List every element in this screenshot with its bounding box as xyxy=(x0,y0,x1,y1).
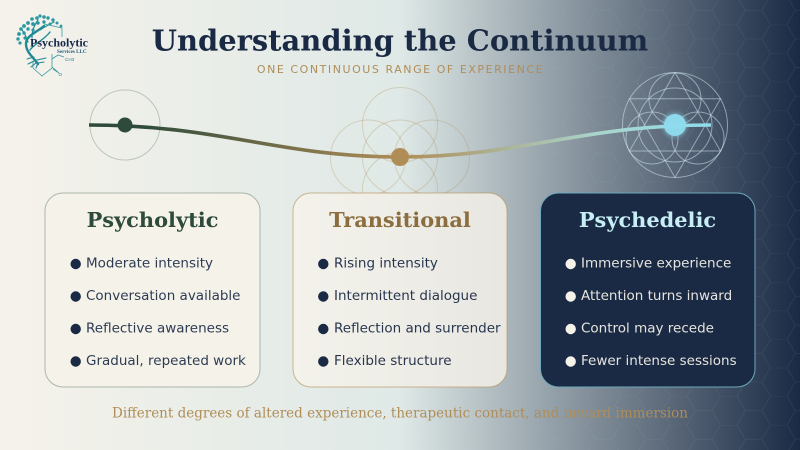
right geometry: sacred geometry figure xyxy=(622,72,728,178)
logo molecule lines xyxy=(33,24,64,76)
list: psycholytic: Gradual, repeated work xyxy=(86,353,246,369)
logo CH3 label: CH3 xyxy=(65,57,75,62)
heading: transitional: Transitional xyxy=(329,207,471,232)
panel: psychedelic xyxy=(540,193,755,387)
list: transitional xyxy=(318,255,501,369)
centre geometry: five overlapping circles xyxy=(330,88,470,228)
subtitle: ONE CONTINUOUS RANGE OF EXPERIENCE xyxy=(257,63,544,76)
hexagon pattern xyxy=(669,0,800,450)
panel: transitional xyxy=(293,193,507,387)
continuum curve xyxy=(89,125,711,157)
list: psychedelic: Immersive experience xyxy=(581,255,731,271)
logo O label: O xyxy=(58,72,62,77)
list: transitional: Flexible structure xyxy=(334,353,452,369)
list: psychedelic xyxy=(566,255,737,369)
list: transitional: Intermittent dialogue xyxy=(334,288,477,304)
node: psychedelic xyxy=(663,113,687,137)
list: psychedelic: Control may recede xyxy=(581,320,714,336)
title: Understanding the Continuum xyxy=(152,24,648,58)
panel: psycholytic xyxy=(45,193,260,387)
left geometry: single circle xyxy=(90,90,160,160)
list: psychedelic: Attention turns inward xyxy=(581,288,732,304)
node: transitional xyxy=(391,148,409,166)
node: psycholytic xyxy=(118,118,132,132)
logo: Psycholytic Services LLC xyxy=(16,14,89,77)
list: psycholytic: Moderate intensity xyxy=(86,255,213,271)
list: psycholytic: Reflective awareness xyxy=(86,320,229,336)
list: psychedelic: Fewer intense sessions xyxy=(581,353,737,369)
footer caption: Different degrees of altered experience, therapeutic contact, and inward immersion xyxy=(112,406,688,422)
logo wordmark: Psycholytic xyxy=(30,36,89,50)
heading: psychedelic: Psychedelic xyxy=(579,207,716,232)
heading: psycholytic: Psycholytic xyxy=(87,207,218,232)
list: transitional: Reflection and surrender xyxy=(334,320,501,336)
logo tree leaves xyxy=(16,14,62,45)
logo sub-wordmark: Services LLC xyxy=(57,49,87,55)
list: psycholytic xyxy=(70,255,246,369)
list: transitional: Rising intensity xyxy=(334,255,438,271)
list: psycholytic: Conversation available xyxy=(86,288,240,304)
logo tree trunk and roots xyxy=(22,20,54,68)
